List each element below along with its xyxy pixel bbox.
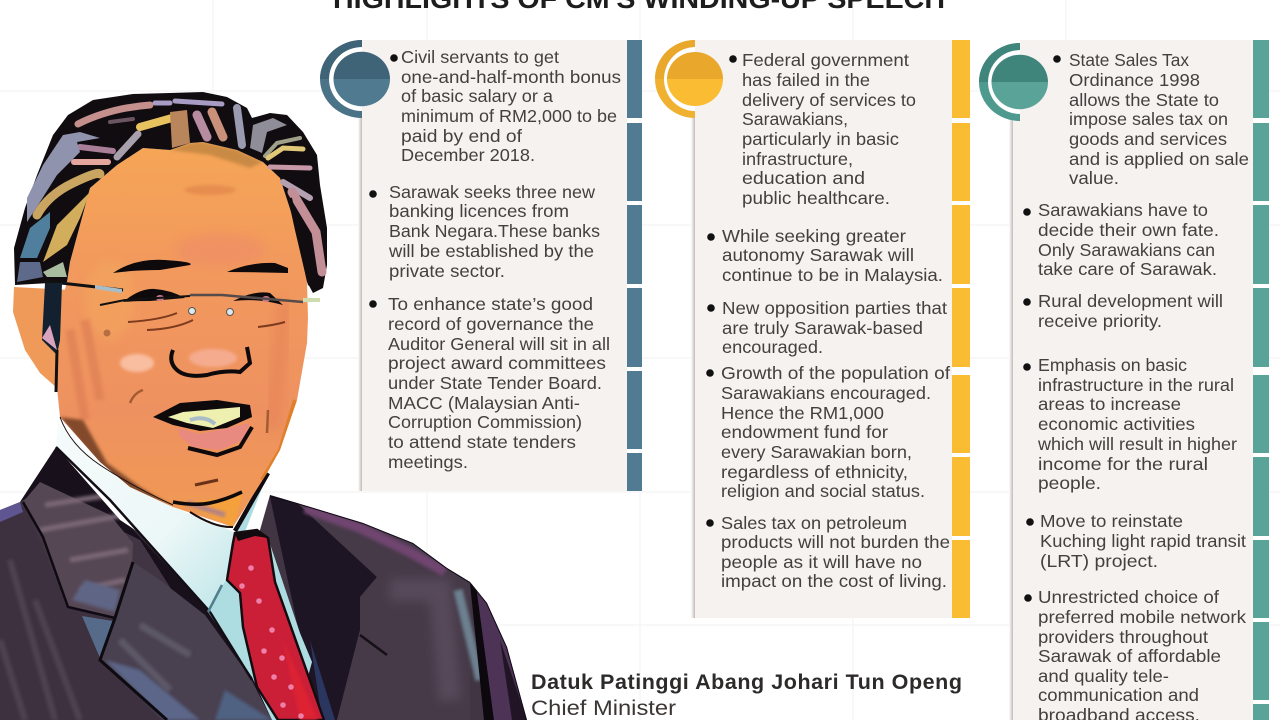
eyes [123, 289, 283, 305]
icon: yellow ring marker [655, 40, 723, 118]
bullet: governance: Auditor General will sit in all [388, 334, 610, 354]
eyebrows [113, 260, 288, 273]
notch [82, 616, 113, 658]
bullet: federal government failure: delivery of services to [742, 90, 916, 110]
bullet: state sales tax: allows the State to [1069, 90, 1219, 110]
bullet: own fate [1023, 200, 1219, 279]
right shoulder [297, 503, 470, 720]
bullet: own fate: Only Sarawakians can [1038, 240, 1215, 260]
shirt and collar [56, 423, 312, 720]
bullet: federal government failure: education and [742, 168, 865, 188]
icon: blue ring marker [320, 40, 390, 118]
bullet: opposition parties: are truly Sarawak-based [722, 318, 923, 338]
bullet: federal government failure [729, 50, 916, 208]
right dark lapel [270, 497, 377, 720]
side bar: teal segments [1253, 40, 1269, 720]
left body shading [0, 505, 167, 720]
bullet: civil servants bonus: December 2018. [401, 145, 535, 165]
bullet: autonomy: While seeking greater [722, 226, 906, 246]
side bar: blue segments [627, 40, 642, 491]
bullet: petroleum sales tax: impact on the cost of living. [721, 571, 947, 591]
bullet: petroleum sales tax: Sales tax on petroleum [721, 513, 907, 533]
suit jacket [0, 440, 530, 720]
bullet: civil servants bonus: one-and-half-month bonus [401, 67, 621, 87]
bullet: rural infrastructure: Emphasis on basic [1038, 355, 1187, 375]
bullet: banking licences: Sarawak seeks three new [389, 182, 595, 202]
bullet: population growth: religion and social status. [721, 481, 925, 501]
face [57, 142, 308, 527]
bullet: state sales tax: impose sales tax on [1069, 109, 1228, 129]
bullet: rural infrastructure: infrastructure in the rural [1038, 375, 1234, 395]
bullet: Kuching LRT: (LRT) project. [1040, 551, 1158, 571]
caption: name: Datuk Patinggi Abang Johari Tun Openg [531, 670, 962, 694]
bullet: petroleum sales tax [706, 513, 950, 591]
bullet: mobile networks: communication and [1038, 685, 1199, 705]
bullet: population growth: every Sarawakian born, [721, 442, 912, 462]
bullet: own fate: decide their own fate. [1038, 220, 1219, 240]
bullet: petroleum sales tax: products will not burden the [721, 532, 950, 552]
bullet: rural development: receive priority. [1038, 311, 1162, 331]
bullet: mobile networks: and quality tele- [1038, 666, 1169, 686]
bullet: federal government failure: public healthcare. [742, 188, 890, 208]
bullet: federal government failure: infrastructure, [742, 149, 853, 169]
bullet: mobile networks: Unrestricted choice of [1038, 587, 1219, 607]
bullet: petroleum sales tax: people as it will have no [721, 552, 922, 572]
bullet: state sales tax: and is applied on sale [1069, 149, 1249, 169]
bullet: governance: to attend state tenders [388, 432, 576, 452]
bullet: Kuching LRT [1026, 511, 1246, 571]
bullet: opposition parties [707, 298, 947, 357]
bullet: federal government failure: has failed in the [742, 70, 870, 90]
bullet: own fate: Sarawakians have to [1038, 200, 1208, 220]
bullet: autonomy [707, 226, 943, 285]
bullet: banking licences: Bank Negara.These banks [389, 221, 600, 241]
bullet: own fate: take care of Sarawak. [1038, 259, 1217, 279]
side bar: yellow segments [952, 40, 970, 618]
hair [14, 92, 327, 293]
icon: teal ring marker [979, 43, 1048, 121]
bullet: governance: Corruption Commission) [388, 412, 582, 432]
bullet: civil servants bonus: paid by end of [401, 126, 522, 146]
bullet: governance: under State Tender Board. [388, 373, 602, 393]
bullet: banking licences: will be established by the [388, 241, 594, 261]
bullet: rural infrastructure: income for the rural [1038, 454, 1208, 474]
bullet: Kuching LRT: Kuching light rapid transit [1040, 531, 1246, 551]
bullet: state sales tax: value. [1069, 168, 1119, 188]
dark wedge by collar [20, 447, 280, 720]
bullet: population growth: Sarawakians encouraged. [721, 383, 931, 403]
bullet: banking licences: private sector. [389, 261, 505, 281]
upper left lapel [23, 482, 133, 617]
bullet: governance: To enhance state’s good [388, 294, 593, 314]
bullet: autonomy: continue to be in Malaysia. [722, 265, 943, 285]
bullet: federal government failure: particularly in basic [742, 129, 899, 149]
bullet: civil servants bonus [390, 47, 621, 165]
bullet: banking licences [369, 182, 600, 281]
bullet: rural infrastructure: which will result in higher [1037, 434, 1237, 454]
bullet: Kuching LRT: Move to reinstate [1040, 511, 1183, 531]
bullet: autonomy: autonomy Sarawak will [722, 245, 914, 265]
bullet: mobile networks: Sarawak of affordable [1038, 646, 1221, 666]
bullet: population growth: Growth of the population of [721, 363, 950, 383]
mouth [153, 400, 252, 455]
bullet: governance: MACC (Malaysian Anti- [388, 393, 580, 413]
bullet: opposition parties: New opposition parties that [722, 298, 947, 318]
bullet: state sales tax: goods and services [1069, 129, 1227, 149]
bullet: civil servants bonus: of basic salary or a [401, 86, 553, 106]
bullet: mobile networks [1024, 587, 1246, 720]
bullet: population growth: endowment fund for [721, 422, 888, 442]
bullet: governance [369, 294, 610, 472]
lower left lapel [100, 562, 272, 720]
bullet: state sales tax: State Sales Tax [1069, 50, 1189, 70]
bullet: governance: meetings. [388, 452, 468, 472]
bullet: population growth [706, 363, 950, 501]
panel: civil service and governance [320, 40, 642, 491]
bullet: rural infrastructure: economic activities [1038, 414, 1195, 434]
bullet: state sales tax: Ordinance 1998 [1069, 70, 1200, 90]
glasses [42, 281, 320, 392]
bullet: federal government failure: Federal government [742, 50, 909, 70]
bullet: civil servants bonus: minimum of RM2,000 to be [401, 106, 617, 126]
nose [171, 347, 250, 376]
bullet: opposition parties: encouraged. [722, 337, 823, 357]
bullet: rural development [1023, 291, 1223, 331]
bullet: rural development: Rural development will [1038, 291, 1223, 311]
bullet: civil servants bonus: Civil servants to get [401, 47, 559, 67]
bullet: rural infrastructure [1023, 355, 1237, 493]
bullet: governance: project award committees [388, 353, 606, 373]
necktie [227, 530, 324, 720]
panel: federal relations [655, 40, 970, 618]
bullet: state sales tax [1053, 50, 1249, 188]
lower eye creases [128, 313, 285, 330]
bullet: governance: record of governance the [388, 314, 594, 334]
bullet: population growth: Hence the RM1,000 [721, 403, 884, 423]
bullet: mobile networks: providers throughout [1038, 627, 1208, 647]
bullet: mobile networks: preferred mobile network [1038, 607, 1246, 627]
bullet: rural infrastructure: people. [1038, 473, 1101, 493]
ear [13, 287, 70, 388]
bullet: rural infrastructure: areas to increase [1038, 394, 1181, 414]
bullet: population growth: regardless of ethnicity, [721, 462, 908, 482]
bullet: federal government failure: Sarawakians, [742, 109, 848, 129]
bullet: banking licences: banking licences from [389, 201, 569, 221]
caption: role: Chief Minister [531, 696, 676, 720]
portrait: Chief Minister illustration [0, 92, 530, 720]
panel: state matters [979, 40, 1269, 720]
